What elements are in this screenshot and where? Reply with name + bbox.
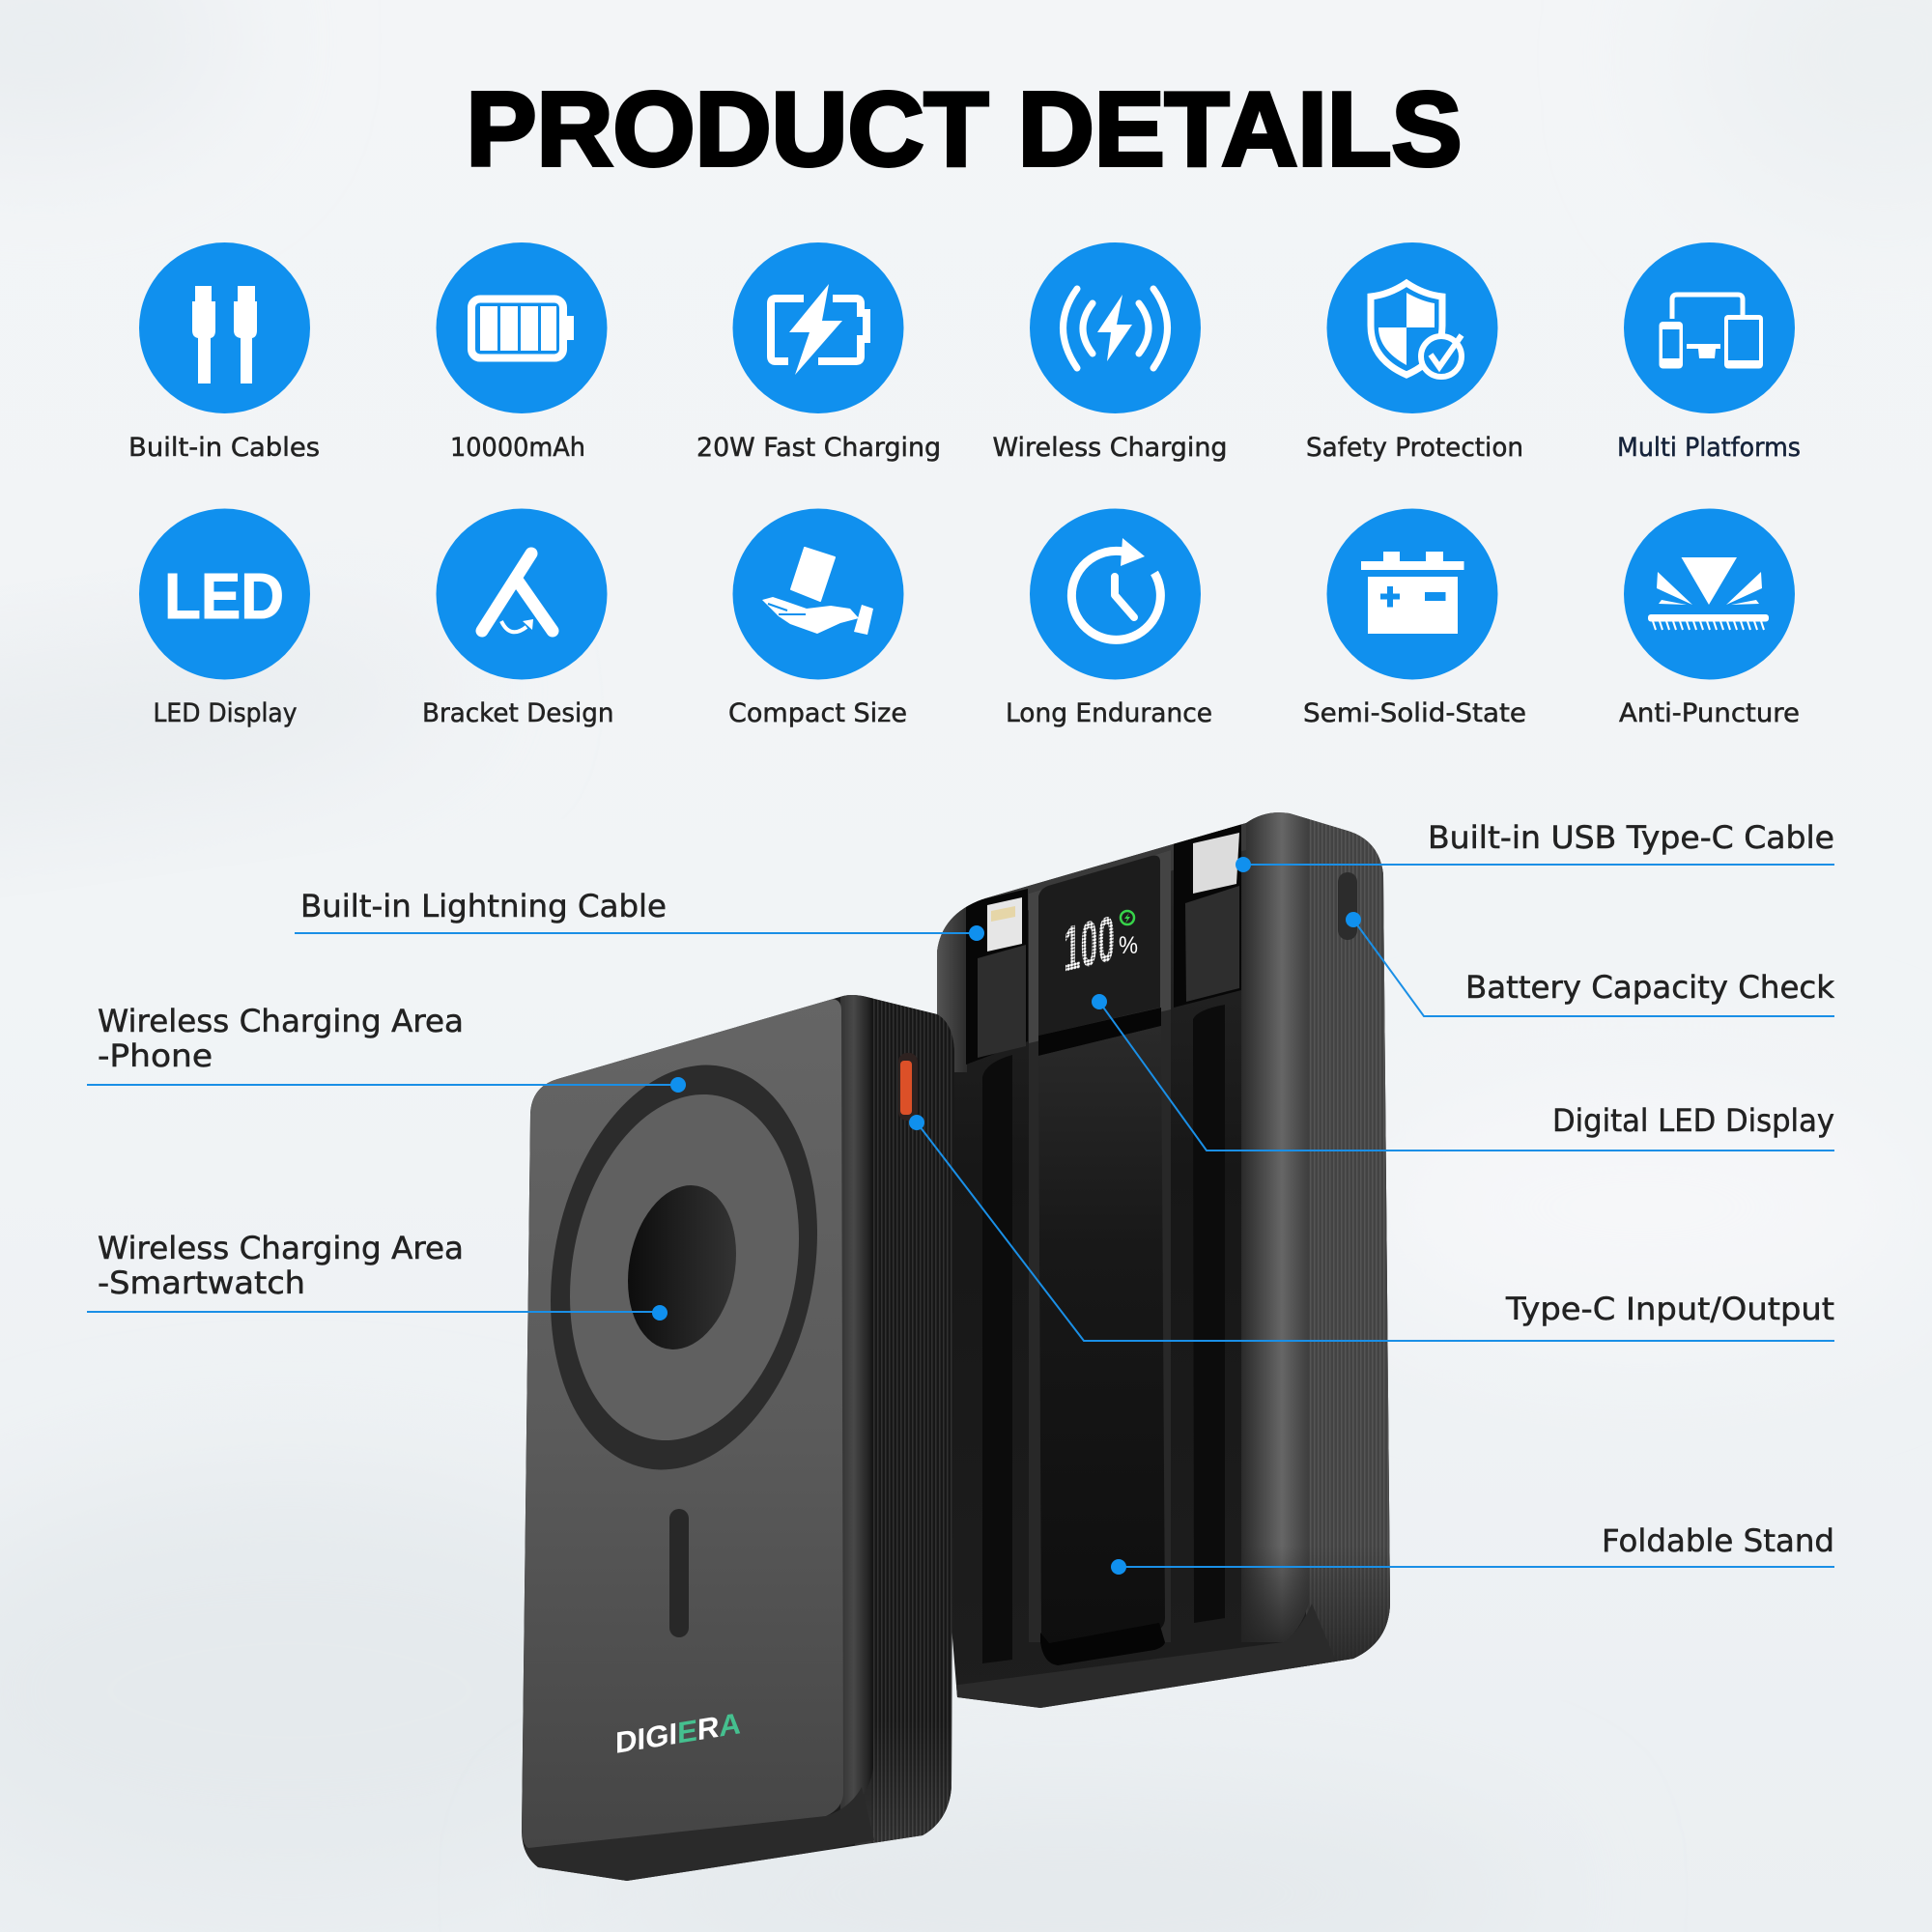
feature: LED display	[139, 508, 310, 728]
LED charge icon	[1121, 911, 1134, 924]
right cable channel	[1193, 1005, 1225, 1623]
feature: 10000mAh	[437, 242, 607, 463]
label: multi platforms: Multi Platforms	[1617, 433, 1801, 463]
callout: wireless charging phone: Wireless Charging Area	[98, 1003, 464, 1039]
product: power bank back view: 100	[1064, 902, 1115, 986]
icon: bracket	[482, 554, 553, 632]
icon: hand holding card	[762, 548, 873, 635]
icon: clock with arrow	[1071, 538, 1160, 639]
bottom chamfer	[952, 1604, 1338, 1715]
feature: built-in cables	[128, 242, 320, 463]
callout: built-in usb type-c cable: Built-in USB Type-C Cable	[1428, 819, 1834, 856]
feature: anti-puncture	[1619, 508, 1800, 728]
LED percent sign: %	[1119, 932, 1138, 959]
callout: battery capacity check	[1346, 912, 1834, 1016]
label: anti-puncture: Anti-Puncture	[1619, 698, 1800, 728]
LED display panel	[1038, 856, 1160, 1036]
icon: car battery	[1361, 552, 1464, 634]
magnetic ring	[551, 1034, 817, 1501]
ribbed corner shading	[1285, 1569, 1390, 1669]
top left edge	[937, 906, 967, 1072]
ribbed side	[1306, 802, 1393, 1671]
stand lip	[1040, 1623, 1165, 1665]
foldable stand	[1038, 1026, 1165, 1659]
product: power bank front view	[512, 985, 966, 1893]
lightning metal connector	[987, 897, 1022, 952]
ribbed corner lightening	[855, 1719, 956, 1845]
callout: built-in lightning cable	[295, 888, 984, 941]
callout: built-in usb type-c cable	[1236, 819, 1834, 872]
label: bracket design: Bracket Design	[422, 698, 614, 728]
callout: wireless charging phone	[87, 1003, 686, 1093]
feature: semi-solid-state	[1303, 508, 1526, 728]
type-c recess	[1174, 823, 1241, 1008]
capacity button	[1338, 872, 1357, 940]
type-c port surround	[898, 1053, 918, 1121]
icon: wireless waves	[1063, 289, 1167, 368]
type-c cable head	[1185, 886, 1239, 1002]
callout: wireless charging smartwatch	[87, 1230, 668, 1321]
feature: compact size	[728, 508, 907, 728]
callout: type-c input/output: Type-C Input/Output	[1505, 1291, 1834, 1327]
callout: foldable stand: Foldable Stand	[1602, 1522, 1834, 1559]
label: 20W fast charging: 20W Fast Charging	[696, 433, 941, 463]
icon: puncture resistant	[1648, 557, 1769, 630]
product: power bank back view	[927, 802, 1401, 1719]
side highlight	[1241, 802, 1309, 1642]
rounded edge	[840, 995, 873, 1811]
feature: wireless charging	[993, 242, 1227, 463]
feature: fast charging	[696, 242, 941, 463]
icon: LED text: LED	[164, 560, 284, 633]
icon: charging bolt	[771, 284, 867, 375]
lightning cable head	[978, 945, 1026, 1058]
lightning contacts	[991, 906, 1015, 922]
LED frame highlight	[1029, 850, 1171, 1043]
callout: wireless charging smartwatch: -Smartwatch	[98, 1264, 305, 1301]
callout: wireless charging phone: -Phone	[98, 1037, 213, 1074]
icon: shield	[1371, 283, 1462, 377]
stand slot	[1038, 1008, 1161, 1056]
center frame	[1029, 850, 1171, 1642]
label: safety protection: Safety Protection	[1306, 433, 1523, 463]
label: long endurance: Long Endurance	[1006, 698, 1212, 728]
feature: bracket design	[422, 508, 614, 728]
indicator pill	[669, 1509, 689, 1637]
icon: cables	[192, 286, 257, 384]
title: PRODUCT DETAILS	[466, 71, 1463, 188]
smartwatch charging area	[628, 1173, 736, 1362]
label: compact size: Compact Size	[728, 698, 907, 728]
callout: battery capacity check: Battery Capacity Check	[1465, 969, 1834, 1006]
callout: type-c input/output	[909, 1115, 1834, 1341]
callout: built-in lightning cable: Built-in Lightning Cable	[300, 888, 667, 924]
icon: devices	[1660, 295, 1763, 369]
callout: digital LED display: Digital LED Display	[1552, 1102, 1834, 1139]
left cable channel	[982, 1055, 1012, 1663]
callout: wireless charging smartwatch: Wireless Charging Area	[98, 1230, 464, 1266]
feature: long endurance	[1006, 508, 1212, 728]
label: semi-solid-state: Semi-Solid-State	[1303, 698, 1526, 728]
front face	[522, 999, 843, 1848]
lightning recess	[966, 889, 1028, 1065]
icon: battery	[471, 299, 574, 357]
label: wireless charging: Wireless Charging	[993, 433, 1227, 463]
label: built-in cables: Built-in Cables	[128, 433, 320, 463]
label: 10000mAh: 10000mAh	[450, 433, 585, 463]
callout: digital LED display	[1092, 994, 1834, 1151]
bottom chamfer	[517, 1787, 874, 1889]
feature: safety protection	[1306, 242, 1523, 463]
label: LED display: LED Display	[153, 698, 298, 728]
type-c metal connector	[1193, 833, 1239, 894]
top band	[966, 823, 1246, 910]
brand logo: DIGIERA	[615, 1706, 741, 1760]
type-c port orange insert	[900, 1061, 912, 1115]
callout: foldable stand	[1111, 1522, 1834, 1575]
ribbed side	[871, 995, 958, 1855]
feature: multi platforms	[1617, 242, 1801, 463]
side highlight bottom shading	[1242, 1559, 1309, 1642]
